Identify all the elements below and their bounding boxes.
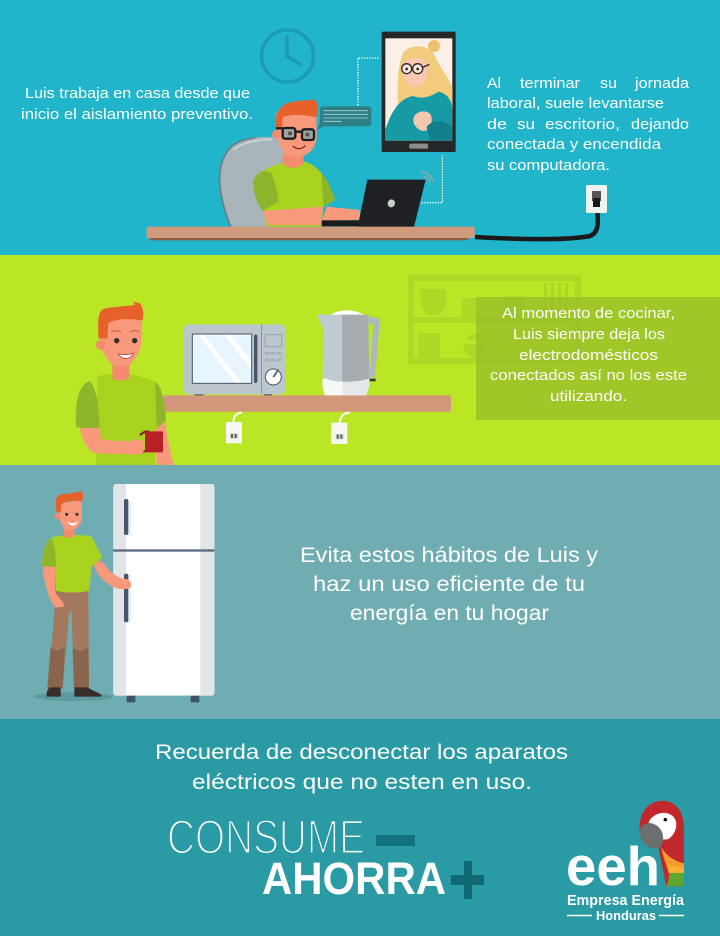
man with mug (76, 302, 174, 465)
text: leaves computer on: laboral, suele levantarse (487, 95, 664, 112)
logo: eeh: Honduras (596, 908, 656, 923)
panel: footer (0, 719, 720, 936)
text: avoid habits: Evita estos hábitos de Luis y (300, 544, 599, 567)
logo: eeh: eeh (566, 835, 660, 897)
text: Luis works from home: Luis trabaja en casa desde que (25, 85, 250, 102)
illustration: man at desk with laptop and tablet (147, 32, 475, 240)
text box: cooking habit (476, 297, 720, 420)
icon: electric kettle (317, 310, 380, 395)
text: leaves computer on: su (517, 116, 535, 133)
text box: cooking habit: utilizando. (550, 388, 627, 405)
text: leaves computer on: dejando (631, 116, 689, 133)
panel: fridge (0, 465, 720, 719)
text: leaves computer on: su (600, 75, 617, 92)
icon: chat bubble (317, 106, 371, 130)
man standing (42, 491, 131, 697)
icon: clock (262, 30, 314, 82)
text: leaves computer on: su computadora. (487, 157, 610, 174)
man: head (276, 110, 317, 158)
text box: cooking habit: electrodomésticos (519, 347, 658, 364)
text: leaves computer on: terminar (520, 75, 580, 92)
illustration: man, appliances and counter (76, 302, 451, 465)
desk (147, 227, 475, 240)
text: leaves computer on: jornada (634, 75, 690, 92)
text: reminder (155, 740, 568, 794)
slogan: save more: AHORRA (262, 853, 446, 904)
panel: home office (0, 0, 720, 255)
text: leaves computer on: conectada y encendida (487, 136, 662, 153)
text box: cooking habit: conectados así no los este (490, 367, 687, 384)
icon: outlet with cord right (331, 413, 349, 444)
chair (220, 137, 287, 227)
text box: cooking habit: Luis siempre deja los (513, 326, 665, 343)
text: Luis works from home: inicio el aislamiento preventivo. (21, 106, 253, 123)
man: torso (253, 162, 335, 227)
text: avoid habits: haz un uso eficiente de tu (313, 573, 585, 596)
text: leaves computer on: Al (487, 75, 501, 92)
text: reminder: Recuerda de desconectar los aparatos (155, 740, 568, 764)
logo: eeh: Empresa Energía (567, 892, 685, 909)
counter (163, 395, 451, 412)
illustration: man beside fridge (34, 484, 214, 702)
icon: outlet with cord left (226, 413, 242, 443)
icon: microwave (184, 324, 285, 395)
text: reminder: eléctricos que no esten en uso. (192, 770, 532, 794)
text: avoid habits (300, 544, 599, 625)
text: leaves computer on: escritorio, (545, 116, 620, 133)
text: Luis works from home (21, 85, 253, 123)
icon: wall outlet with cable (475, 185, 607, 239)
shelf silhouette (408, 275, 581, 364)
text: avoid habits: energía en tu hogar (350, 602, 549, 625)
dotted connectors (358, 58, 442, 203)
text: leaves computer on: de (487, 116, 507, 133)
icon: wifi waves (421, 172, 433, 183)
icon: tablet video call (382, 32, 456, 152)
shadow (34, 692, 113, 701)
icon: refrigerator (113, 484, 214, 702)
slogan: consume less: CONSUME (167, 812, 365, 864)
icon: macaw (640, 801, 684, 886)
icon: laptop (322, 180, 426, 227)
logo: eeh (566, 801, 685, 923)
text: leaves computer on (487, 75, 690, 174)
text box: cooking habit: Al momento de cocinar, (502, 305, 675, 322)
panel: kitchen (0, 255, 720, 465)
